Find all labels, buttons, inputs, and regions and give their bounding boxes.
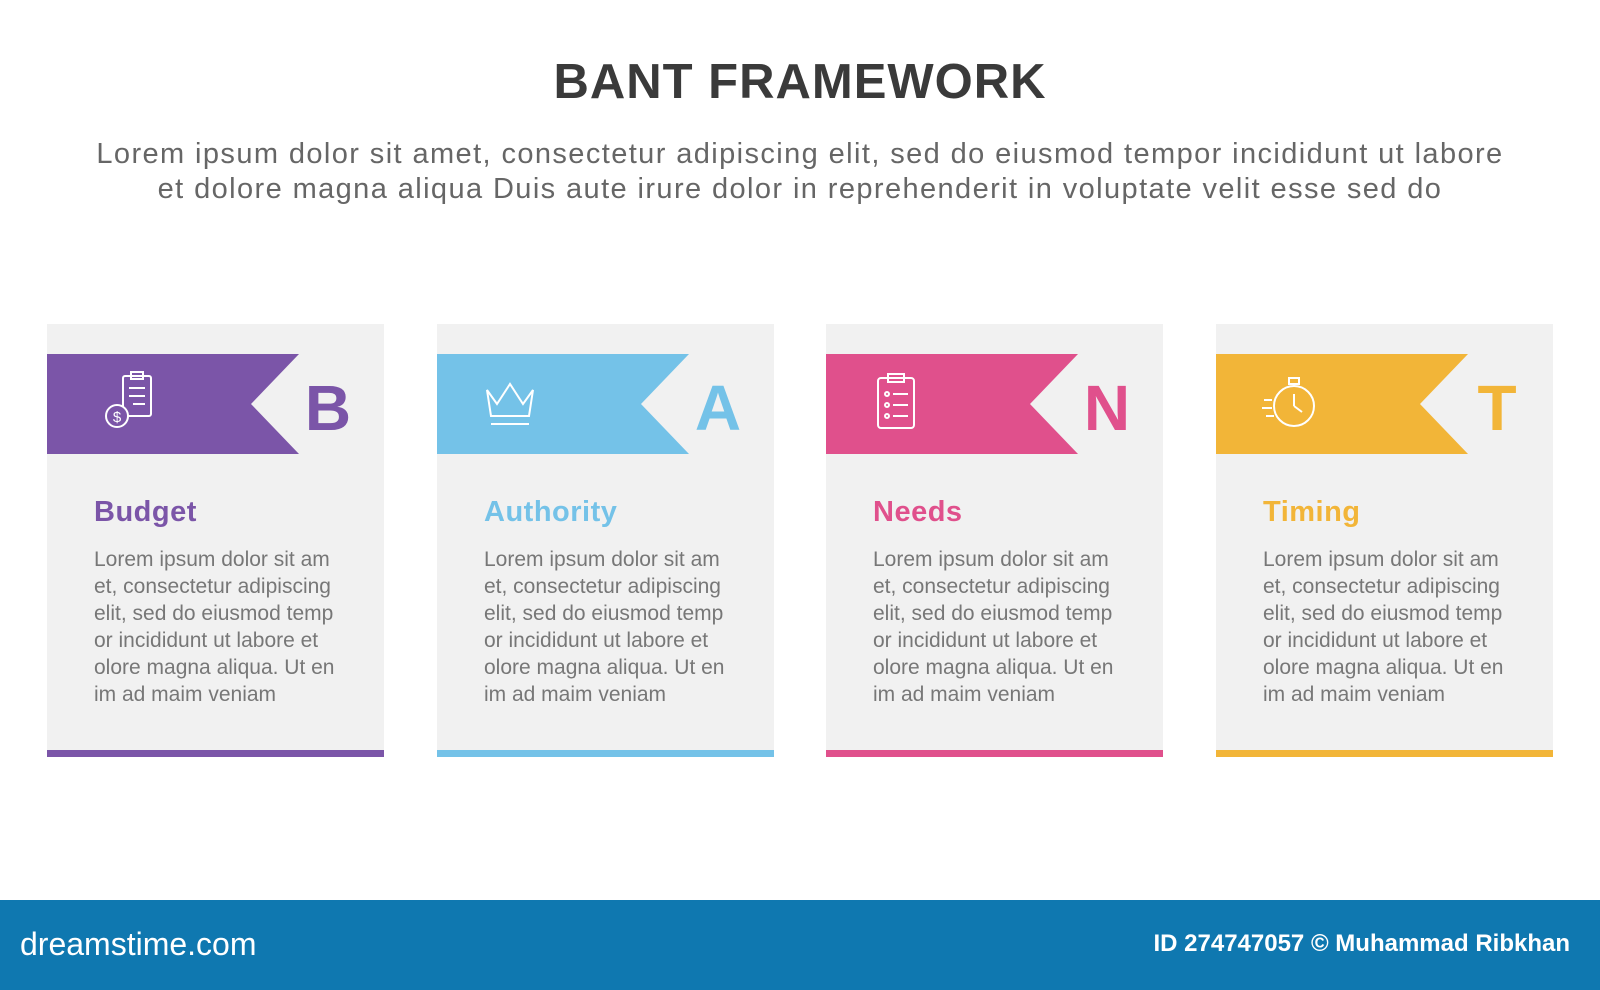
text: authority: im ad maim veniam bbox=[484, 683, 666, 706]
heading: authority: Authority bbox=[484, 496, 617, 528]
text: budget: im ad maim veniam bbox=[94, 683, 276, 706]
text: timing: or incididunt ut labore et bbox=[1263, 629, 1487, 652]
card: needs: N bbox=[1084, 372, 1130, 444]
subtitle: Lorem ipsum dolor sit amet, consectetur adipiscing elit, sed do eiusmod tempor incididunt ut labore bbox=[96, 138, 1504, 170]
text: needs: Lorem ipsum dolor sit am bbox=[873, 548, 1109, 571]
text: authority: olore magna aliqua. Ut en bbox=[484, 656, 724, 679]
text: needs: im ad maim veniam bbox=[873, 683, 1055, 706]
subtitle bbox=[96, 138, 1504, 205]
text: authority: elit, sed do eiusmod temp bbox=[484, 602, 723, 625]
banner: authority bbox=[437, 354, 689, 454]
text: budget: or incididunt ut labore et bbox=[94, 629, 318, 652]
heading: timing: Timing bbox=[1263, 496, 1361, 528]
text: timing: et, consectetur adipiscing bbox=[1263, 575, 1500, 598]
banner: budget bbox=[47, 354, 299, 454]
text: authority bbox=[484, 548, 724, 706]
footer logo: dreamstime.com bbox=[20, 926, 256, 962]
footer credit: ID 274747057 © Muhammad Ribkhan bbox=[1153, 930, 1570, 957]
text: authority: et, consectetur adipiscing bbox=[484, 575, 721, 598]
banner: timing bbox=[1216, 354, 1468, 454]
card: timing: T bbox=[1477, 372, 1517, 444]
title: BANT FRAMEWORK bbox=[553, 55, 1047, 109]
banner: needs bbox=[826, 354, 1078, 454]
banner: budget: $ bbox=[113, 409, 122, 426]
text: needs: et, consectetur adipiscing bbox=[873, 575, 1110, 598]
text: budget: olore magna aliqua. Ut en bbox=[94, 656, 334, 679]
card: authority: A bbox=[695, 372, 741, 444]
text: needs bbox=[873, 548, 1114, 706]
card: needs bbox=[826, 324, 1163, 757]
text: needs: elit, sed do eiusmod temp bbox=[873, 602, 1112, 625]
text: timing: im ad maim veniam bbox=[1263, 683, 1445, 706]
text: needs: or incididunt ut labore et bbox=[873, 629, 1097, 652]
card: budget bbox=[47, 324, 384, 757]
text: budget bbox=[94, 548, 334, 706]
text: budget: elit, sed do eiusmod temp bbox=[94, 602, 333, 625]
text: timing: olore magna aliqua. Ut en bbox=[1263, 656, 1504, 679]
text: budget: et, consectetur adipiscing bbox=[94, 575, 331, 598]
text: timing bbox=[1263, 548, 1504, 706]
text: timing: elit, sed do eiusmod temp bbox=[1263, 602, 1502, 625]
card: authority bbox=[437, 324, 774, 757]
text: authority: Lorem ipsum dolor sit am bbox=[484, 548, 720, 571]
text: timing: Lorem ipsum dolor sit am bbox=[1263, 548, 1499, 571]
footer bbox=[0, 900, 1600, 990]
card: timing bbox=[1216, 324, 1553, 757]
text: needs: olore magna aliqua. Ut en bbox=[873, 656, 1114, 679]
heading: needs: Needs bbox=[873, 496, 963, 528]
subtitle: et dolore magna aliqua Duis aute irure dolor in reprehenderit in voluptate velit esse sed do bbox=[158, 173, 1442, 205]
text: authority: or incididunt ut labore et bbox=[484, 629, 708, 652]
card: budget: B bbox=[305, 372, 351, 444]
text: budget: Lorem ipsum dolor sit am bbox=[94, 548, 330, 571]
heading: budget: Budget bbox=[94, 496, 197, 528]
